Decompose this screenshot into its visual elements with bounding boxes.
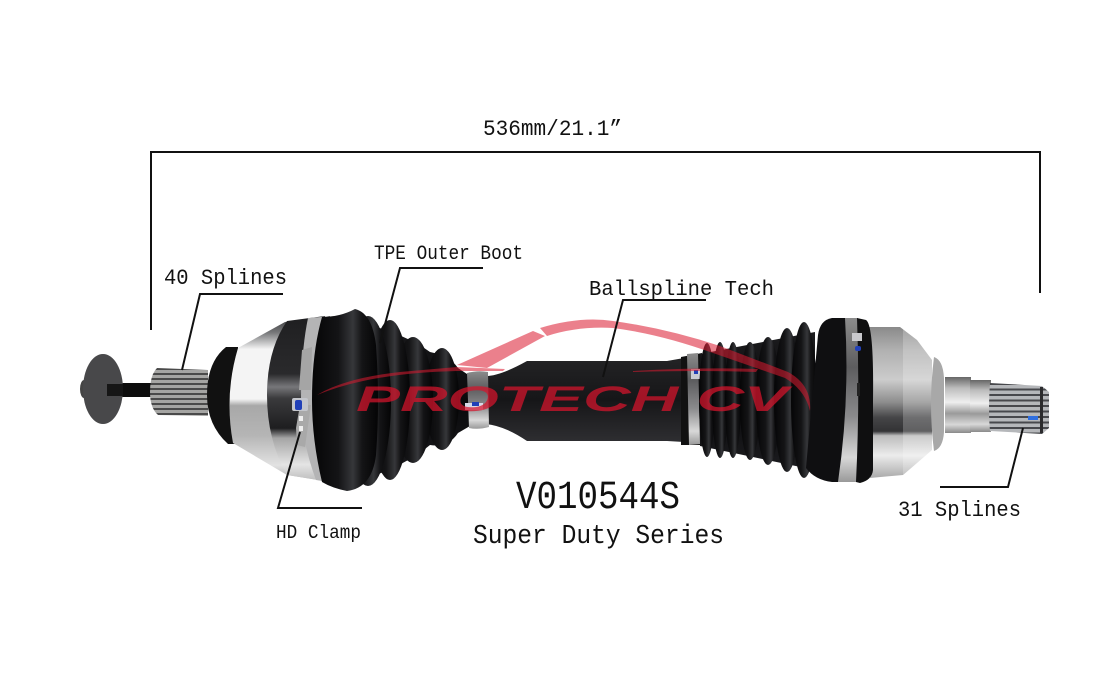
right inner clamp <box>681 353 702 445</box>
left splines <box>150 368 208 416</box>
callout: 40 Splines <box>164 266 287 370</box>
right boot <box>699 318 852 482</box>
callout: TPE Outer Boot: TPE Outer Boot <box>374 243 523 266</box>
dimension bracket <box>151 152 1040 330</box>
callout: HD Clamp: HD Clamp <box>276 522 361 544</box>
left joint housing <box>229 316 330 482</box>
convolution f <box>774 328 800 472</box>
convolution 2 <box>345 316 391 486</box>
logo wordmark: PROTECH CV <box>356 380 793 419</box>
convolution 4 <box>393 337 433 463</box>
callout: 31 Splines: 31 Splines <box>898 498 1021 523</box>
boot base <box>700 332 815 470</box>
callout: Ballspline Tech <box>589 279 774 377</box>
right clamp band <box>838 318 873 483</box>
convolution e <box>756 337 780 465</box>
right stub shaft <box>931 357 991 451</box>
boot base <box>340 318 470 485</box>
right joint housing <box>868 327 932 478</box>
centre clamp <box>465 371 489 429</box>
callout: 31 Splines <box>898 428 1023 523</box>
convolution g <box>791 322 817 478</box>
callout: 40 Splines: 40 Splines <box>164 266 287 291</box>
callout: HD Clamp <box>276 432 362 544</box>
convolution 3 <box>370 320 410 480</box>
series name: Super Duty Series <box>473 522 724 552</box>
left boot <box>312 309 470 491</box>
left black ring <box>207 347 238 444</box>
left washer and bolt <box>80 354 151 424</box>
watermark logo <box>317 320 810 419</box>
axle shaft assembly <box>80 309 1049 491</box>
left clamp hardware <box>292 347 312 447</box>
logo swoosh <box>317 320 810 411</box>
callout: Ballspline Tech: Ballspline Tech <box>589 279 774 302</box>
left clamp band <box>301 316 334 483</box>
convolution d <box>740 342 760 460</box>
right splines <box>989 383 1049 434</box>
centre tube <box>486 358 684 442</box>
neck convolution <box>425 348 459 450</box>
boot shoulder <box>806 318 852 482</box>
part number: V010544S <box>516 476 680 521</box>
boot shoulder <box>312 309 378 491</box>
convolution c <box>725 342 741 458</box>
convolution a <box>699 343 715 457</box>
convolution b <box>712 342 728 458</box>
callout: TPE Outer Boot <box>374 243 523 343</box>
dimension label: 536mm/21.1” <box>483 117 622 142</box>
